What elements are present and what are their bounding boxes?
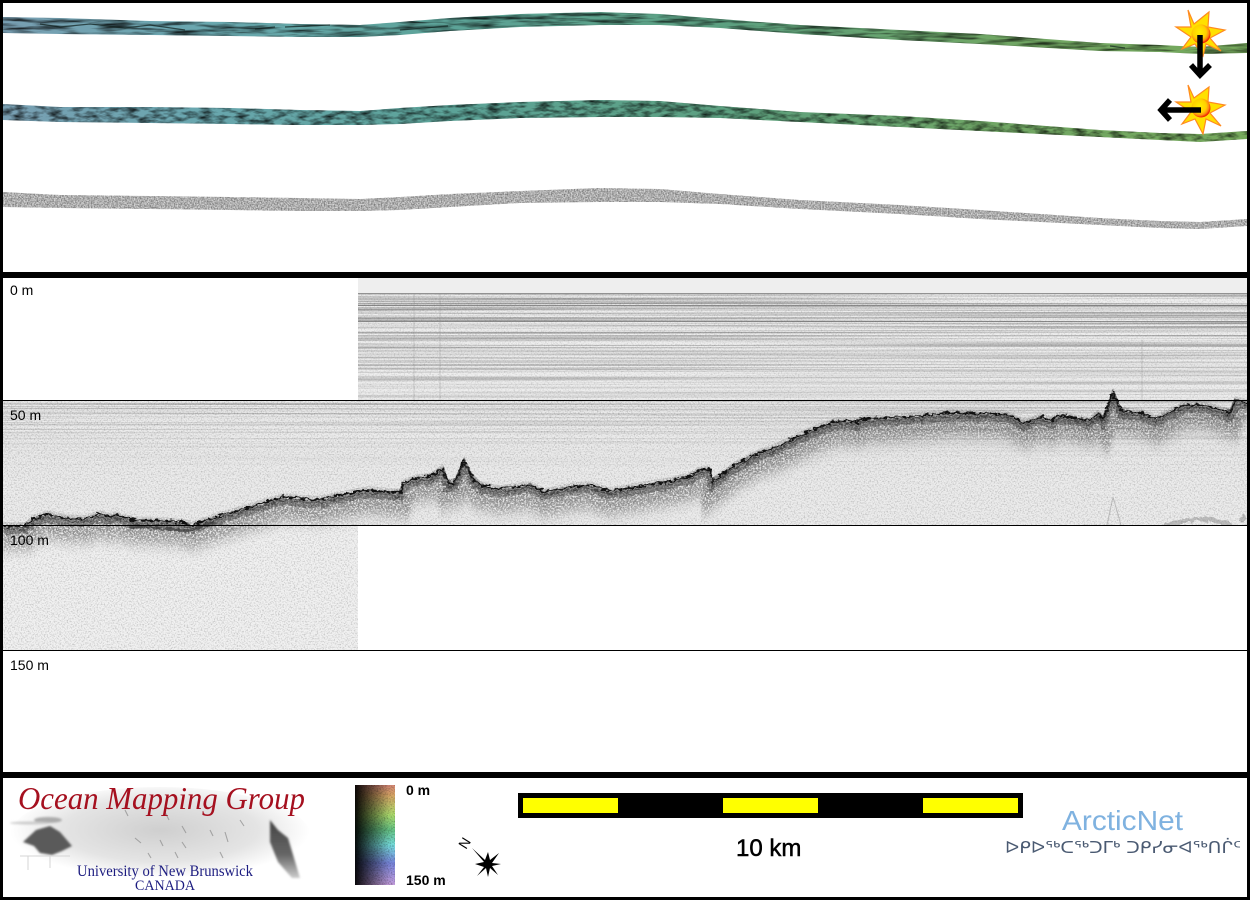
scale bar label: 10 km — [736, 835, 801, 862]
logo title text: Ocean Mapping Group — [18, 781, 305, 816]
panel: backscatter and bathymetry strips — [3, 10, 1247, 229]
arrow: pointing left — [1161, 100, 1201, 120]
echogram: main profile section with seabed — [3, 392, 1247, 651]
arrow: pointing down — [1191, 35, 1210, 75]
logo sketch lines — [20, 856, 70, 870]
legend: depth colour bar — [355, 785, 395, 885]
logo sonar target left — [10, 817, 72, 855]
legend label: 150 m: 150 m — [406, 872, 446, 888]
legend label: 0 m: 0 m — [406, 782, 430, 798]
logo country text: CANADA — [135, 878, 196, 894]
logo pockmark streaks — [125, 810, 244, 858]
icon: sun illumination east — [1176, 85, 1225, 134]
deep clutter at lower right — [1107, 497, 1246, 525]
label: 100 m: 100 m — [10, 532, 49, 548]
logo: Ocean Mapping Group — [10, 781, 310, 894]
icon: sun illumination north — [1176, 10, 1225, 56]
seabed sub-surface shading — [3, 396, 1247, 537]
label: 50 m: 50 m — [10, 407, 41, 423]
strip: sun-illuminated bathymetry from north — [3, 12, 1247, 54]
echogram: water column upper section — [358, 278, 1247, 400]
blank area right of the lower section — [358, 526, 1247, 650]
depth grid lines — [3, 400, 1247, 650]
logo: ArcticNet: ArcticNet — [1062, 805, 1183, 836]
scale bar — [518, 793, 1023, 818]
logo: ArcticNet — [1005, 805, 1241, 858]
syllabics wordmark: ᐅᑭᐅᖅᑕᖅᑐᒥᒃ ᑐᑭᓯᓂᐊᖅᑎᒌᑦ — [1005, 837, 1241, 858]
north letter: N — [455, 835, 474, 852]
logo sonar target right — [270, 820, 300, 878]
panel: subbottom profile echogram — [3, 278, 1247, 651]
icon: north arrow — [455, 835, 501, 877]
strip: sun-illuminated bathymetry from east — [3, 100, 1247, 142]
logo university text: University of New Brunswick — [77, 863, 253, 880]
strip: sidescan backscatter mosaic — [3, 188, 1247, 229]
label: 150 m: 150 m — [10, 657, 49, 673]
noise texture — [3, 401, 1247, 651]
seabed reflector — [3, 392, 1247, 531]
label: 0 m: 0 m — [10, 282, 33, 298]
